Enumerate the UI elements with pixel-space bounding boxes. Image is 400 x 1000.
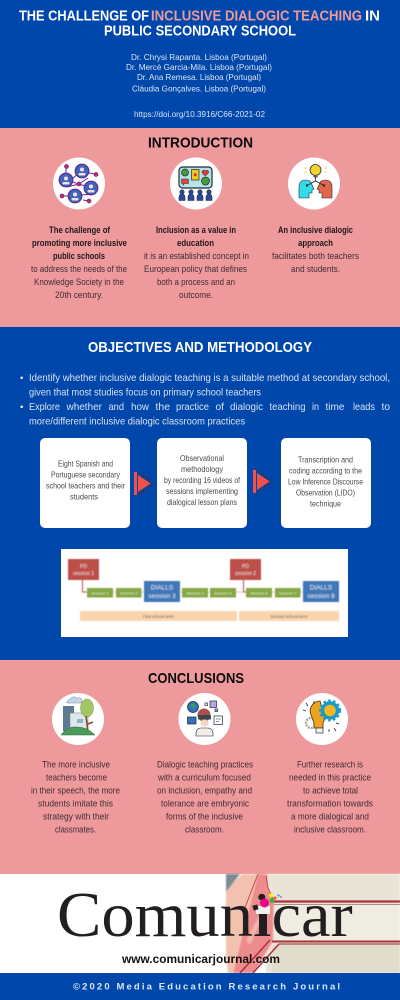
title: PUBLIC SECONDARY SCHOOL [104, 24, 296, 40]
first school term [80, 611, 237, 621]
green sessions [87, 588, 300, 598]
text: inclusive public schools [31, 225, 127, 300]
text: further research: a more dialogical and [291, 812, 369, 822]
objectives list: how [131, 402, 150, 413]
objectives list: to [382, 402, 390, 413]
icon: classroom board with audience [170, 158, 222, 210]
authors: Dr. Mercè Garcia-Mila. Lisboa (Portugal) [126, 62, 272, 72]
objectives list: practice [176, 402, 209, 413]
title [19, 8, 380, 40]
text: further research: Further research is [297, 760, 363, 770]
text: inclusion as a value: both a process and an [157, 277, 235, 287]
text: further research [287, 760, 373, 834]
heading: conclusions: CONCLUSIONS [148, 670, 244, 687]
panel: header [0, 0, 400, 128]
copyright line: ©2020 Media Education Research Journal [73, 982, 340, 992]
text: inclusion as a value: it is an established concept in [144, 251, 249, 261]
PD session 2 [230, 559, 261, 580]
authors [126, 52, 272, 94]
card: methodology: Observational [180, 453, 224, 463]
text: inclusive dialogic approach [272, 225, 359, 274]
text: dialogic teaching practices: on inclusion, empathy and [157, 786, 252, 796]
text: further research: needed in this practice [289, 772, 371, 782]
text: more inclusive teachers: strategy with their [43, 812, 109, 822]
green sessions: Session 2 [120, 590, 138, 596]
DIALLS session 8: DIALLS [310, 584, 333, 592]
text: dialogic teaching practices: forms of the inclusive [166, 812, 243, 822]
arrow: first [134, 472, 153, 496]
text: more inclusive teachers: in their speech, the more [31, 786, 120, 796]
card: methodology: dialogical lesson plans [167, 497, 237, 507]
green sessions: Session 7 [279, 590, 297, 596]
icon: light bulb with gears [296, 693, 348, 745]
text: dialogic teaching practices [157, 760, 253, 834]
text: dialogic teaching practices: classroom. [185, 824, 224, 834]
text: dialogic teaching practices: with a curriculum focused [157, 772, 251, 782]
text: inclusion as a value: education [177, 238, 214, 248]
icon: person with VR headset [178, 693, 230, 745]
text: inclusion as a value: European policy that defines [144, 264, 247, 274]
card: participants: school teachers and their [46, 480, 125, 490]
DIALLS session 8: session 8 [307, 593, 335, 600]
panel: introduction [0, 128, 400, 327]
objectives list: time [326, 402, 345, 413]
card: transcription: Transcription and [298, 454, 353, 464]
card: methodology: sessions implementing [166, 486, 238, 496]
text: inclusion as a value: Inclusion as a value in [156, 225, 236, 235]
text: inclusive public schools: 20th century. [55, 290, 103, 300]
text: more inclusive teachers: classmates. [55, 824, 96, 834]
objectives list: and [108, 402, 124, 413]
card: participants: Eight Spanish and [58, 458, 113, 468]
card: participants [40, 438, 130, 528]
objectives list [20, 373, 390, 428]
Comunicar logo: Comunicar [57, 880, 353, 951]
text: more inclusive teachers: The more inclusive [42, 760, 110, 770]
text: more inclusive teachers [31, 760, 120, 834]
second school term: Second school term [270, 614, 308, 619]
objectives list: in [312, 402, 319, 413]
text: inclusive public schools: promoting more inclusive [32, 238, 127, 248]
card: transcription: coding according to the [289, 466, 362, 476]
card: transcription: Low Inference Discourse [288, 476, 363, 486]
title: IN [365, 8, 380, 24]
objectives list: more/different inclusive dialogic classroom practices [29, 416, 245, 428]
text: inclusion as a value: outcome. [179, 290, 213, 300]
text: more inclusive teachers: teachers become [46, 772, 107, 782]
panel: footer [0, 973, 400, 1000]
objectives list: Explore [29, 402, 60, 413]
text: dialogic teaching practices: Dialogic teaching practices [157, 760, 253, 770]
text: further research: transformation towards [287, 798, 373, 808]
text: dialogic teaching practices: tolerance are embryonic [161, 798, 249, 808]
second school term [239, 611, 339, 621]
objectives list: whether [66, 402, 103, 413]
text: inclusion as a value [144, 225, 249, 300]
DIALLS session 3 [144, 581, 180, 602]
heading: introduction: INTRODUCTION [148, 134, 253, 152]
panel: conclusions [0, 660, 400, 874]
DIALLS session 3: session 3 [148, 593, 176, 600]
card: methodology: by recording 16 videos of [164, 475, 241, 485]
title: THE CHALLENGE OF [19, 8, 149, 24]
text: inclusive public schools: public schools [53, 251, 105, 261]
green sessions: Session 4 [186, 590, 205, 596]
text: inclusive dialogic approach: facilitates both teachers [272, 251, 359, 261]
objectives list: of [216, 402, 224, 413]
first school term: First school term [143, 614, 174, 619]
text: inclusive public schools: to address the needs of the [31, 264, 127, 274]
objectives list: given that most studies focus on primary school teachers [29, 388, 261, 398]
text: inclusive dialogic approach: and students. [291, 264, 340, 274]
PD session 1 [68, 559, 99, 580]
text: further research: inclusive classroom. [294, 824, 366, 834]
card: participants: students [70, 492, 98, 502]
text: inclusive dialogic approach: An inclusive dialogic [278, 225, 353, 235]
doi link: https://doi.org/10.3916/C66-2021-02 [134, 109, 265, 119]
objectives list: the [156, 402, 170, 413]
title: INCLUSIVE DIALOGIC TEACHING [151, 8, 362, 24]
card: transcription [281, 438, 371, 528]
arrow: second [253, 470, 272, 494]
website url: www.comunicarjournal.com [121, 952, 280, 966]
heading: objectives and methodology: OBJECTIVES AND METHODOLOGY [88, 339, 312, 356]
icon: two heads sharing an idea [288, 158, 340, 210]
panel: journal banner [0, 874, 400, 973]
text: inclusive public schools: The challenge of [49, 225, 111, 235]
card: methodology: methodology [181, 464, 224, 474]
card: participants: Portuguese secondary [51, 470, 121, 480]
PD session 2: session 2 [235, 571, 256, 577]
text: inclusive public schools: Knowledge Society in the [34, 277, 124, 287]
PD session 1: session 1 [73, 571, 94, 577]
card: transcription: Observation (LIDO) [296, 488, 355, 498]
authors: Cláudia Gonçalves. Lisboa (Portugal) [132, 84, 266, 94]
green sessions: Session 1 [91, 590, 110, 596]
card: transcription: technique [310, 498, 341, 508]
icon: connected people network [53, 158, 105, 210]
PD session 1: PD [80, 564, 87, 570]
objectives list: teaching [270, 402, 306, 413]
panel: objectives and methodology [0, 327, 400, 660]
books photo [226, 874, 400, 973]
green sessions: Session 6 [250, 590, 269, 596]
text: more inclusive teachers: students imitate this [38, 798, 113, 808]
DIALLS session 8 [303, 581, 339, 602]
objectives list: leads [353, 402, 375, 413]
text: further research: to achieve total [303, 786, 358, 796]
DIALLS session 3: DIALLS [151, 584, 174, 592]
objectives list: dialogic [230, 402, 263, 413]
green sessions: Session 5 [214, 590, 233, 596]
card: methodology [157, 438, 247, 528]
icon: school among trees [52, 693, 104, 745]
authors: Dr. Chrysi Rapanta. Lisboa (Portugal) [131, 52, 267, 62]
timeline diagram [61, 549, 348, 637]
authors: Dr. Ana Remesa. Lisboa (Portugal) [137, 72, 261, 82]
text: inclusive dialogic approach: approach [298, 238, 333, 248]
PD session 2: PD [242, 564, 249, 570]
